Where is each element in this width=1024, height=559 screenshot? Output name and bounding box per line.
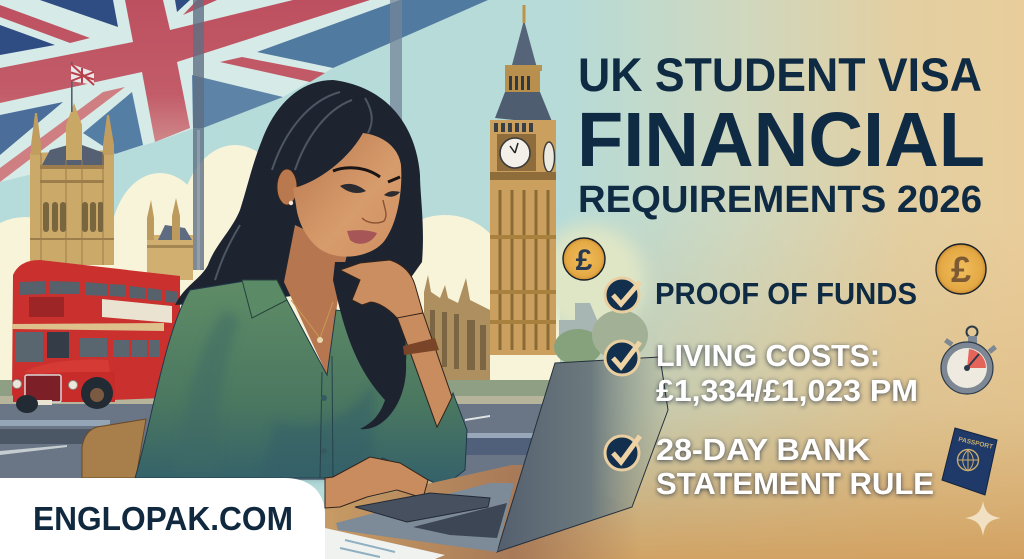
laptop screen back — [497, 357, 668, 552]
laptop base — [336, 483, 514, 552]
check item: bank statement rule: STATEMENT RULE — [656, 466, 934, 501]
hand on calculator — [325, 457, 428, 508]
coin left: £ — [576, 244, 593, 277]
lower warm gradient — [400, 220, 1024, 559]
front hair strand — [333, 262, 406, 429]
coin right — [936, 244, 986, 294]
check item: living costs: £1,334/£1,023 PM — [656, 373, 918, 408]
eyebrows — [333, 168, 400, 182]
hand at chin — [340, 260, 423, 318]
earring — [289, 201, 293, 205]
forearm — [397, 313, 452, 427]
coin left — [563, 238, 605, 280]
necklace — [291, 300, 333, 338]
chair — [82, 419, 146, 478]
hair sheen — [215, 92, 372, 280]
neck — [284, 225, 348, 375]
face — [293, 133, 401, 257]
laptop — [336, 357, 668, 552]
window frame posts — [193, 0, 402, 270]
parliament right wing — [424, 275, 490, 382]
icon: passport: PASSPORT — [958, 436, 994, 451]
title — [577, 48, 985, 221]
small parliament tower — [147, 198, 193, 280]
check item: living costs — [605, 338, 918, 408]
title: REQUIREMENTS 2026 — [578, 179, 982, 221]
icon: stopwatch — [941, 326, 997, 394]
check item: bank statement rule — [605, 432, 934, 501]
big ben tower — [490, 5, 556, 355]
back hair — [175, 80, 423, 305]
ear — [277, 169, 297, 205]
lips — [347, 230, 377, 244]
sparkle — [965, 501, 1001, 536]
paper notes — [325, 528, 445, 559]
distant city and trees — [554, 303, 648, 365]
calculator — [355, 493, 490, 522]
clouds — [0, 145, 645, 395]
check item: proof of funds: PROOF OF FUNDS — [655, 276, 917, 311]
website text: ENGLOPAK.COM — [33, 500, 293, 537]
desk — [325, 465, 640, 559]
icon: passport — [942, 428, 997, 495]
keyboard — [413, 503, 507, 538]
parliament tower left — [30, 62, 114, 265]
coin right: £ — [951, 249, 971, 290]
white label panel — [0, 478, 325, 559]
watch — [403, 338, 439, 355]
shirt — [135, 281, 467, 487]
collar — [242, 280, 287, 318]
shirt shading — [175, 310, 375, 478]
title: FINANCIAL — [577, 97, 985, 183]
woman at laptop — [135, 80, 467, 487]
union jack flag — [0, 0, 488, 182]
street and road — [0, 380, 560, 480]
check item: bank statement rule: 28-DAY BANK — [656, 432, 871, 467]
check item: living costs: LIVING COSTS: — [656, 338, 880, 373]
london red bus — [12, 260, 180, 413]
title: UK STUDENT VISA — [578, 48, 982, 101]
nose — [362, 200, 386, 223]
eyes — [340, 184, 400, 197]
